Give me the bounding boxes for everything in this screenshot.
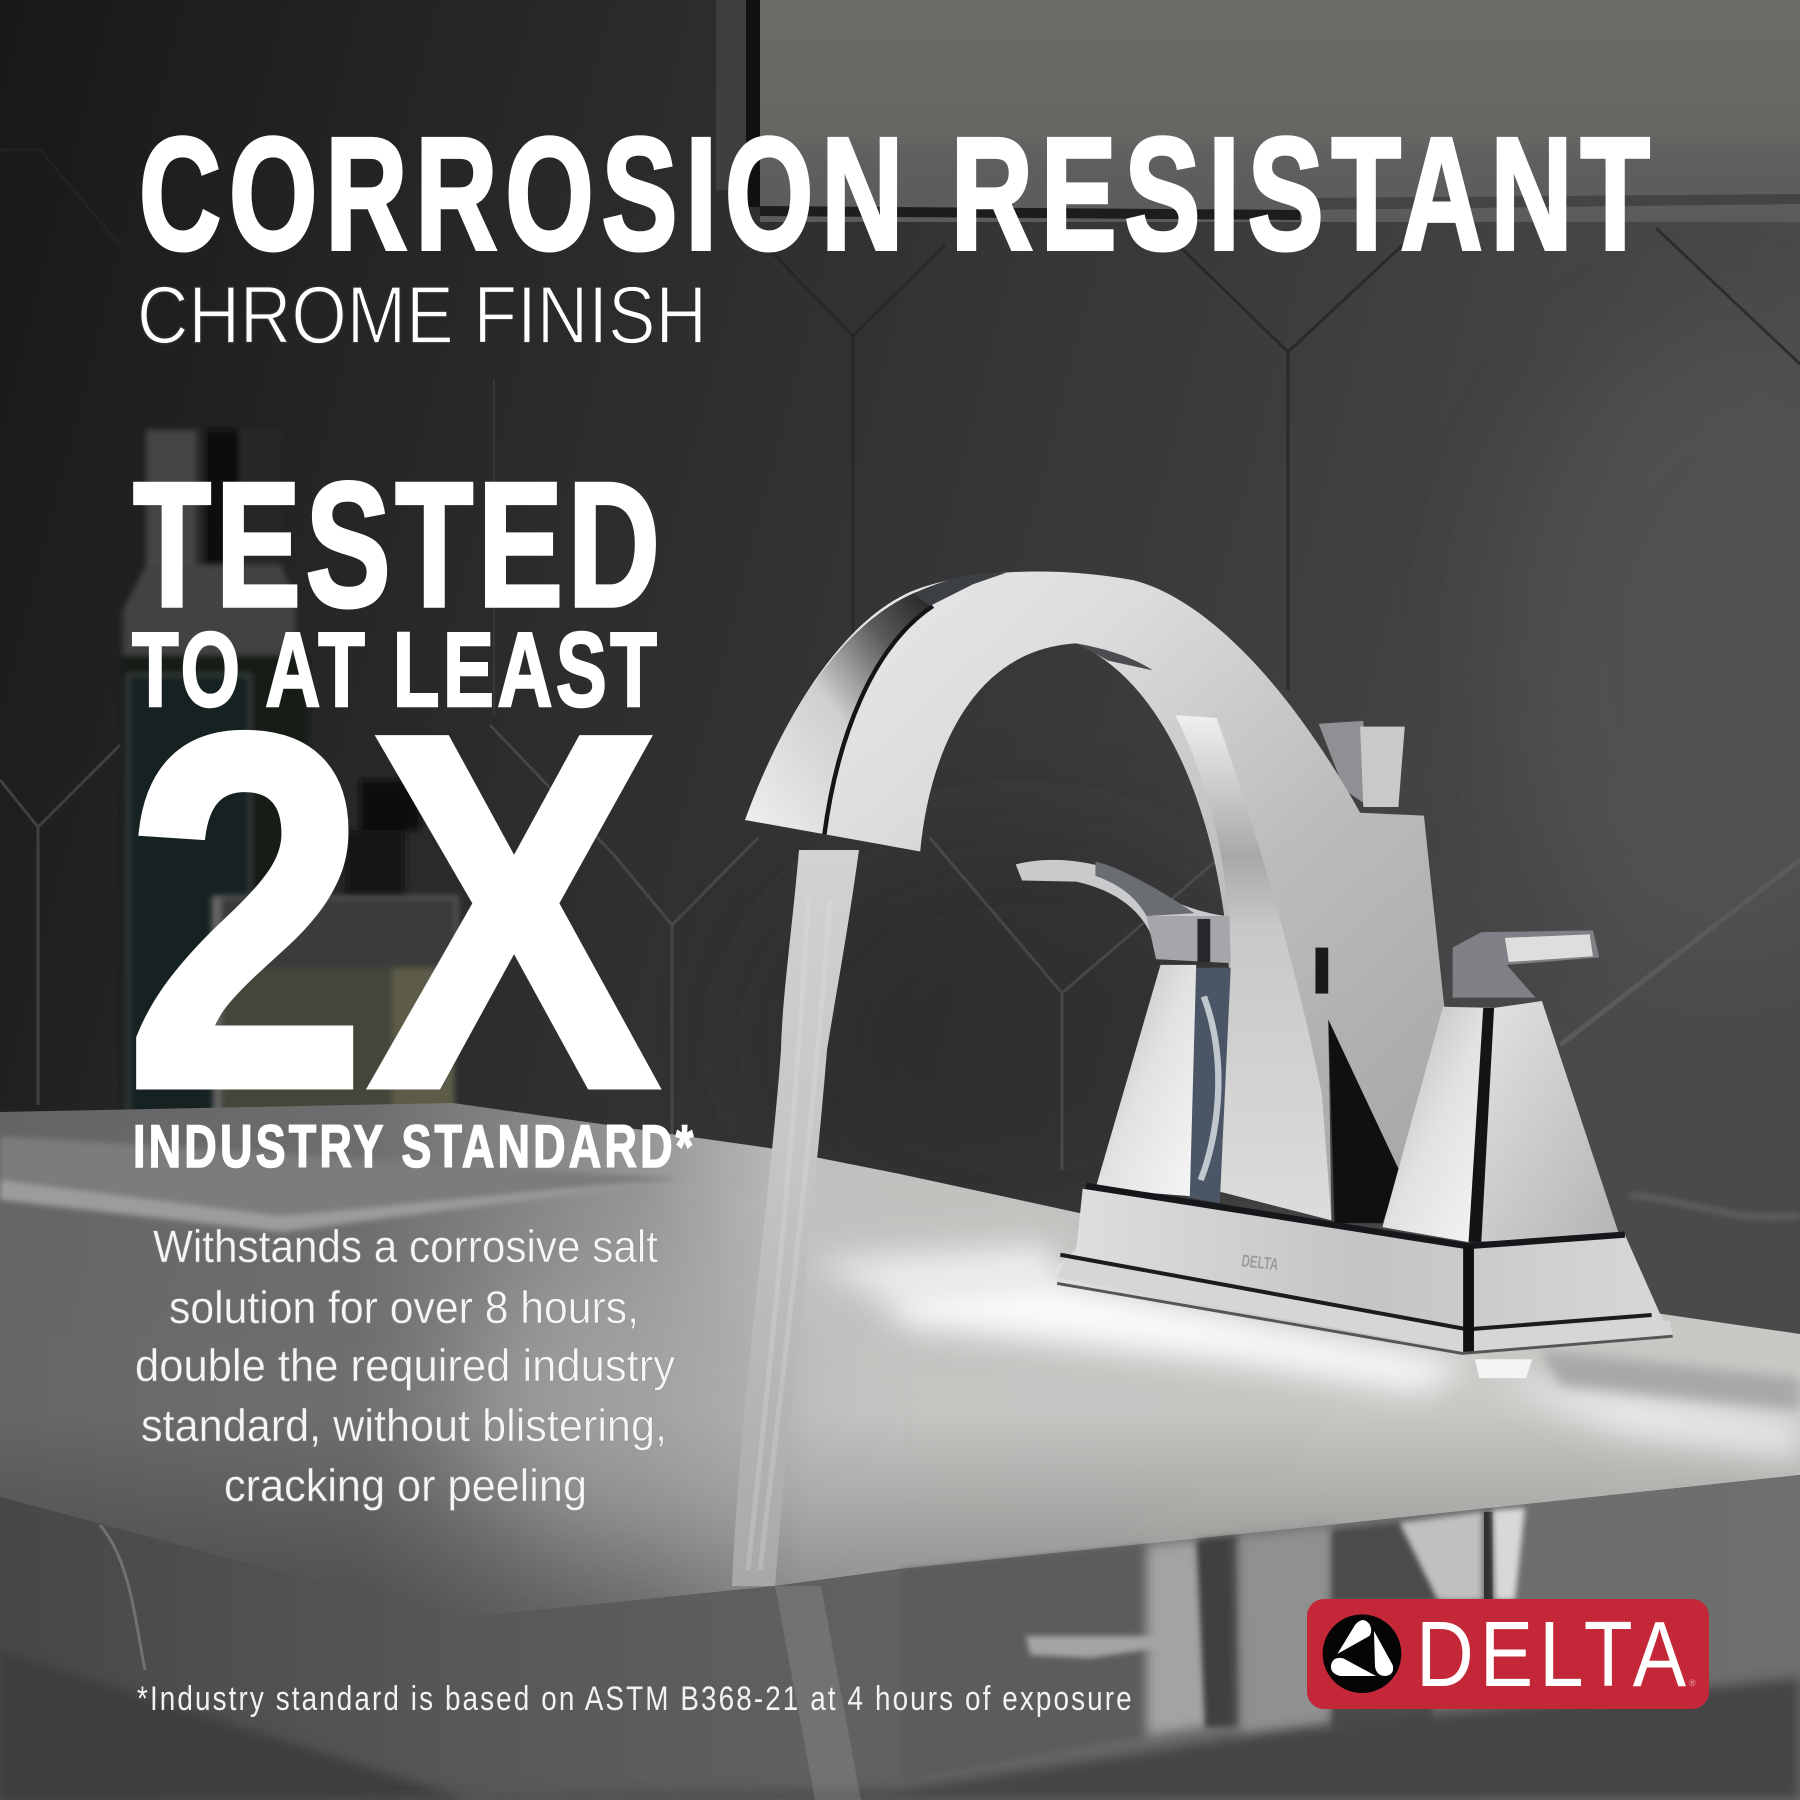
dark gap behind spout: [1328, 1014, 1402, 1223]
body text: double the required industry: [135, 1340, 675, 1391]
headline: industry standard: INDUSTRY STANDARD*: [133, 1114, 694, 1181]
body text: cracking or peeling: [224, 1460, 587, 1511]
logo wordmark: DELTA: [1416, 1602, 1686, 1706]
body text: solution for over 8 hours,: [169, 1282, 639, 1333]
left handle and column: [1016, 860, 1231, 1203]
body text: [135, 1221, 675, 1511]
big stat 2X: 2X: [124, 630, 662, 1194]
chrome faucet: [745, 571, 1673, 1378]
title: CORROSION RESISTANT: [139, 105, 1650, 284]
icon: Delta triangle mark: [1323, 1614, 1401, 1693]
registered mark: ®: [1689, 1678, 1696, 1688]
water stream: [732, 850, 861, 1800]
reflective countertop foreground: [0, 1475, 1800, 1800]
body text: Withstands a corrosive salt: [153, 1221, 658, 1272]
right handle and column: [1382, 930, 1620, 1242]
blurred spray bottle: [123, 430, 420, 1125]
footnote: *Industry standard is based on ASTM B368-21 at 4 hours of exposure: [137, 1679, 1132, 1718]
glass jar: [213, 897, 457, 1148]
background wall with tiles and mirror: [0, 0, 1800, 1400]
spout arch: [745, 571, 1446, 1220]
subtitle: CHROME FINISH: [137, 270, 707, 361]
faucet back handle: [1319, 721, 1405, 807]
white sink and counter: [0, 1103, 1800, 1619]
base engraved wordmark: DELTA: [1240, 1251, 1280, 1274]
headline: to at least: TO AT LEAST: [132, 610, 657, 729]
faucet base plate: [1054, 1186, 1673, 1353]
headline: tested: TESTED: [133, 445, 660, 644]
body text: standard, without blistering,: [141, 1400, 667, 1451]
Delta logo badge: [1307, 1599, 1709, 1709]
